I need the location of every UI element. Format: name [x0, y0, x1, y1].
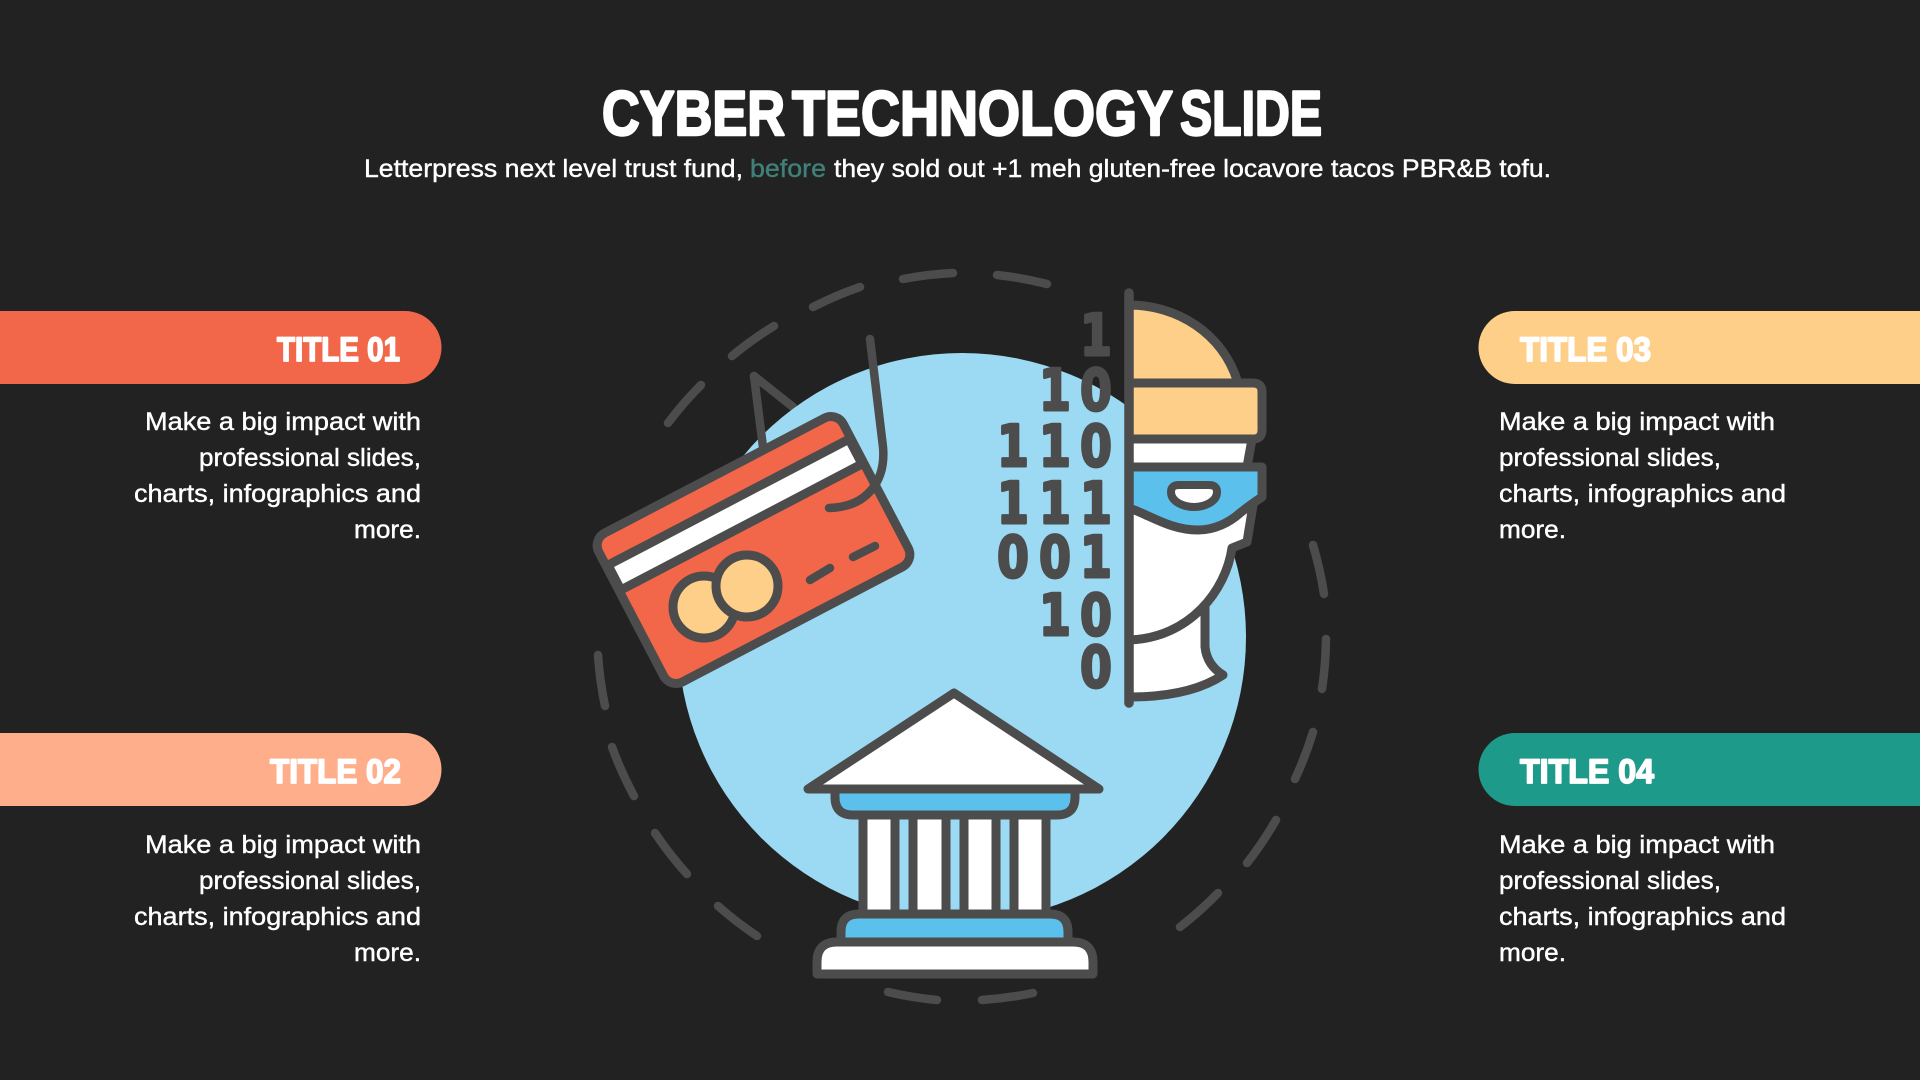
text block: title 02: Make a big impact with — [145, 831, 421, 859]
binary digits — [997, 303, 1112, 701]
title — [602, 79, 1322, 149]
card number dashes — [810, 546, 875, 580]
text block: title 04: more. — [1499, 939, 1566, 967]
icon: bank building — [808, 693, 1099, 974]
eye — [1171, 485, 1217, 507]
text block: title 01: more. — [354, 516, 421, 544]
forehead — [1129, 439, 1252, 467]
icon: hacker head — [1129, 293, 1262, 703]
panel: title 01 — [0, 311, 442, 544]
bank roof — [808, 693, 1099, 789]
text block: title 03: professional slides, — [1499, 444, 1721, 472]
binary digits: 0 — [1039, 525, 1071, 591]
icon: credit card — [592, 412, 915, 688]
binary digits: 1 — [1080, 471, 1112, 537]
text block: title 01: charts, infographics and — [134, 480, 421, 508]
subtitle: before — [750, 155, 826, 183]
text block: title 04: charts, infographics and — [1499, 903, 1786, 931]
centre divider line — [1124, 293, 1134, 703]
text block: title 04: professional slides, — [1499, 867, 1721, 895]
panel: title 03 — [1478, 311, 1920, 544]
face — [1129, 505, 1253, 640]
banner: title 04 — [1478, 733, 1920, 806]
card body and stripe — [592, 412, 915, 688]
text block: title 03: Make a big impact with — [1499, 408, 1775, 436]
text block: title 01: Make a big impact with — [145, 408, 421, 436]
text block: title 02: more. — [354, 939, 421, 967]
binary digits: 1 — [997, 471, 1029, 537]
text block: title 03: more. — [1499, 516, 1566, 544]
binary digits: 1 — [1039, 583, 1071, 649]
icon: fishing hook — [829, 339, 883, 508]
text block: title 04 — [1499, 831, 1786, 967]
bank lower step — [817, 942, 1093, 974]
card chip circle left — [673, 576, 735, 638]
binary digits: 0 — [1080, 583, 1112, 649]
banner: title 02 — [0, 733, 442, 806]
icon: hook barb front stroke — [754, 376, 763, 447]
heading: title 03: TITLE 03 — [1520, 331, 1651, 369]
text block: title 01: professional slides, — [199, 444, 421, 472]
binary digits: 0 — [997, 525, 1029, 591]
bank columns — [863, 812, 1046, 914]
neck — [1129, 605, 1223, 697]
panel: title 04 — [1478, 733, 1920, 967]
binary digits: 1 — [1080, 525, 1112, 591]
binary digits: 1 — [1039, 358, 1071, 424]
heading: title 04: TITLE 04 — [1520, 753, 1654, 791]
bank upper step — [841, 914, 1068, 942]
card chip circle right — [716, 555, 778, 617]
subtitle: they sold out +1 meh gluten-free locavore tacos PBR&B tofu. — [834, 155, 1551, 183]
heading: title 01: TITLE 01 — [277, 331, 400, 369]
text block: title 02: professional slides, — [199, 867, 421, 895]
panel: title 02 — [0, 733, 442, 967]
binary digits: 1 — [1039, 471, 1071, 537]
banner: title 01 — [0, 311, 442, 384]
heading: title 02: TITLE 02 — [270, 753, 401, 791]
text block: title 02: charts, infographics and — [134, 903, 421, 931]
text block: title 02 — [134, 831, 421, 967]
beanie dome — [1129, 305, 1238, 383]
banner: title 03 — [1478, 311, 1920, 384]
title: CYBER — [602, 79, 785, 149]
binary digits: 1 — [1039, 414, 1071, 480]
binary digits: 0 — [1080, 414, 1112, 480]
light blue circle — [678, 353, 1246, 921]
subtitle — [364, 155, 1551, 183]
binary digits: 1 — [997, 414, 1029, 480]
text block: title 03 — [1499, 408, 1786, 544]
subtitle: Letterpress next level trust fund, — [364, 155, 743, 183]
eye mask — [1129, 467, 1262, 530]
text block: title 03: charts, infographics and — [1499, 480, 1786, 508]
title: TECHNOLOGY — [792, 79, 1173, 149]
beanie band — [1129, 383, 1262, 439]
bank entablature — [835, 789, 1075, 815]
binary digits: 0 — [1080, 358, 1112, 424]
dashed ring — [598, 273, 1326, 1000]
icon: hook barb back stroke — [754, 376, 793, 407]
text block: title 04: Make a big impact with — [1499, 831, 1775, 859]
title: SLIDE — [1180, 79, 1322, 149]
binary digits: 0 — [1080, 635, 1112, 701]
binary digits: 1 — [1080, 303, 1112, 369]
text block: title 01 — [134, 408, 421, 544]
